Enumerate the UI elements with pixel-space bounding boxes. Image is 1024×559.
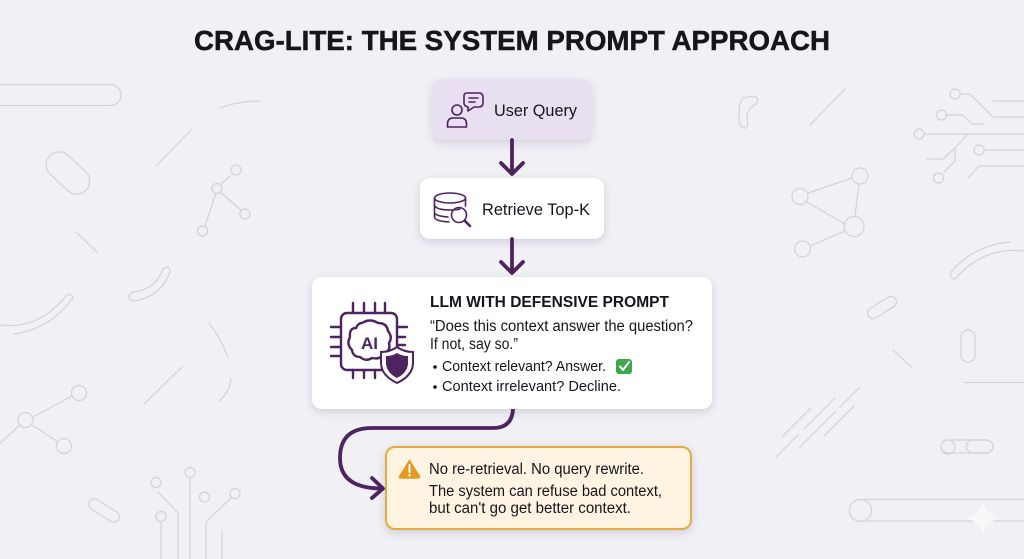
bullet: context relevant: Context relevant? Answer. [442,358,606,375]
curved arrow: LLM to warning [340,409,513,498]
icon: AI chip with brain and shield [331,303,413,383]
watermark sparkle [965,501,1001,535]
title: CRAG-LITE: THE SYSTEM PROMPT APPROACH [194,25,830,56]
quote text: If not, say so.” [430,336,518,353]
warning body: The system can refuse bad context, [429,483,662,500]
heading: LLM with defensive prompt: LLM WITH DEFENSIVE PROMPT [430,294,669,311]
panel: LLM with defensive prompt [312,277,712,409]
node: Retrieve Top-K [420,178,604,239]
decorative background: left line art [0,84,260,559]
quote text: “Does this context answer the question? [430,318,693,335]
quote text [430,318,693,353]
label: Retrieve Top-K: Retrieve Top-K [482,200,591,219]
callout: limitation warning [386,447,691,529]
icon: user with speech bubble [448,93,483,127]
warning body: but can't go get better context. [429,500,631,517]
arrow: query to retrieve [501,140,523,174]
label: User Query: User Query [494,101,577,120]
decorative background: right line art [739,89,1024,522]
icon: AI chip with brain and shield: AI [361,334,378,353]
icon: green check [616,359,632,374]
icon: warning triangle [399,460,420,478]
node: User Query [433,79,591,140]
warning heading: No re-retrieval. No query rewrite. [429,461,644,478]
warning body [429,483,662,517]
bullet: context irrelevant: Context irrelevant? Decline. [442,378,621,395]
arrow: retrieve to LLM [501,239,523,273]
icon: database with magnifier [434,193,470,226]
